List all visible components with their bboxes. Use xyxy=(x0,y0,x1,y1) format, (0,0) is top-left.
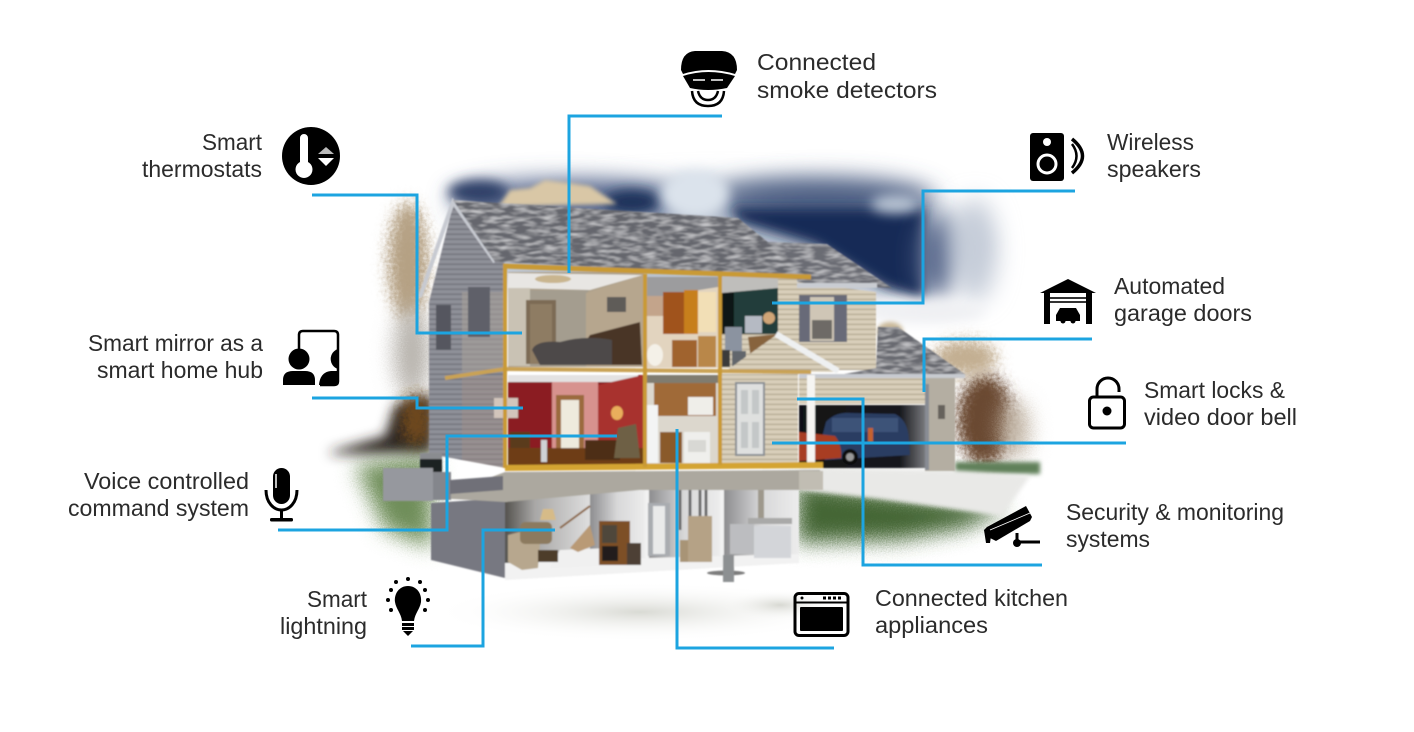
label: security and monitoring systems: Security & monitoring xyxy=(1066,499,1284,525)
line: security systems xyxy=(797,399,1042,565)
icon: smart mirror xyxy=(283,331,338,385)
line: thermostats xyxy=(312,195,522,333)
icon: open padlock xyxy=(1090,378,1124,428)
label: security and monitoring systems xyxy=(1066,499,1284,552)
label: security and monitoring systems: systems xyxy=(1066,526,1150,552)
label: connected smoke detectors: Connected xyxy=(757,49,876,75)
label: smart lightning: lightning xyxy=(280,613,367,639)
line: smart mirror xyxy=(312,398,523,408)
line: smart lightning xyxy=(411,530,555,646)
blue van xyxy=(820,413,910,465)
label: smart lightning: Smart xyxy=(307,586,368,612)
water heater and furnace xyxy=(648,488,712,562)
label: connected kitchen appliances: appliances xyxy=(875,612,988,638)
porch column xyxy=(807,375,815,465)
line: smart locks xyxy=(772,442,1126,444)
garage front xyxy=(799,374,965,471)
label: voice controlled command system: command system xyxy=(68,495,249,521)
icon: wireless speaker xyxy=(1030,133,1082,181)
left side wall xyxy=(429,205,506,468)
sofa and lamp xyxy=(508,509,595,570)
label: automated garage doors: Automated xyxy=(1114,273,1225,299)
line: kitchen appliances xyxy=(677,429,834,648)
front door xyxy=(735,382,765,456)
television cabinet xyxy=(599,521,641,565)
label: smart mirror as a smart home hub xyxy=(88,330,263,383)
icon: garage xyxy=(1040,279,1096,324)
sump pump xyxy=(707,555,745,582)
icon: smoke detector xyxy=(681,51,737,106)
line: smoke detectors xyxy=(569,116,722,273)
washer and sink xyxy=(730,482,792,558)
back roof xyxy=(765,242,892,288)
trees xyxy=(330,180,1029,466)
timber frame xyxy=(445,266,823,468)
basement rooms xyxy=(505,482,799,580)
label: smart thermostats: thermostats xyxy=(142,156,262,182)
icon: light bulb xyxy=(386,577,430,636)
icon: oven xyxy=(795,594,848,636)
label: voice controlled command system: Voice controlled xyxy=(84,468,249,494)
line: wireless speakers xyxy=(772,191,1075,303)
gable trim xyxy=(420,202,495,297)
label: smart mirror as a smart home hub: Smart mirror as a xyxy=(88,330,263,356)
label: smart thermostats xyxy=(142,129,263,182)
line: voice control xyxy=(278,436,617,530)
label: smart thermostats: Smart xyxy=(202,129,263,155)
connector lines xyxy=(278,116,1126,648)
kitchen xyxy=(647,375,718,466)
line: garage doors xyxy=(924,339,1092,392)
outer basement wall xyxy=(431,498,505,578)
label: voice controlled command system xyxy=(68,468,249,521)
storm sky xyxy=(448,170,997,324)
label: automated garage doors: garage doors xyxy=(1114,300,1252,326)
upper right wing wall xyxy=(797,282,876,370)
label: smart mirror as a smart home hub: smart home hub xyxy=(97,357,263,383)
house xyxy=(383,200,966,582)
label: wireless speakers: Wireless xyxy=(1107,129,1194,155)
main roof xyxy=(453,200,811,277)
porch gable xyxy=(726,333,839,372)
label: connected kitchen appliances xyxy=(875,585,1068,638)
red car xyxy=(799,432,841,461)
label: automated garage doors xyxy=(1114,273,1252,326)
office xyxy=(722,277,797,368)
label: smart locks and video door bell xyxy=(1144,377,1297,430)
icon: security camera xyxy=(984,506,1040,547)
label: wireless speakers xyxy=(1107,129,1201,182)
label: wireless speakers: speakers xyxy=(1107,156,1201,182)
label: connected smoke detectors: smoke detectors xyxy=(757,77,937,103)
label: smart locks and video door bell: Smart locks & xyxy=(1144,377,1285,403)
label: smart lightning xyxy=(280,586,368,639)
icon: microphone xyxy=(266,468,297,522)
photo: cutaway house with sky and garden xyxy=(330,170,1040,642)
garage roof xyxy=(839,327,966,375)
icon: thermostat xyxy=(282,127,340,185)
label: connected kitchen appliances: Connected kitchen xyxy=(875,585,1068,611)
label: smart locks and video door bell: video door bell xyxy=(1144,404,1297,430)
porch wall xyxy=(722,374,798,466)
bedroom xyxy=(508,272,644,367)
foundation xyxy=(435,470,822,502)
bathroom xyxy=(647,277,718,368)
AC units xyxy=(383,453,503,501)
upper window xyxy=(799,295,847,342)
label: connected smoke detectors xyxy=(757,49,937,103)
dining room xyxy=(494,375,644,467)
lawn and driveway xyxy=(355,456,1040,642)
